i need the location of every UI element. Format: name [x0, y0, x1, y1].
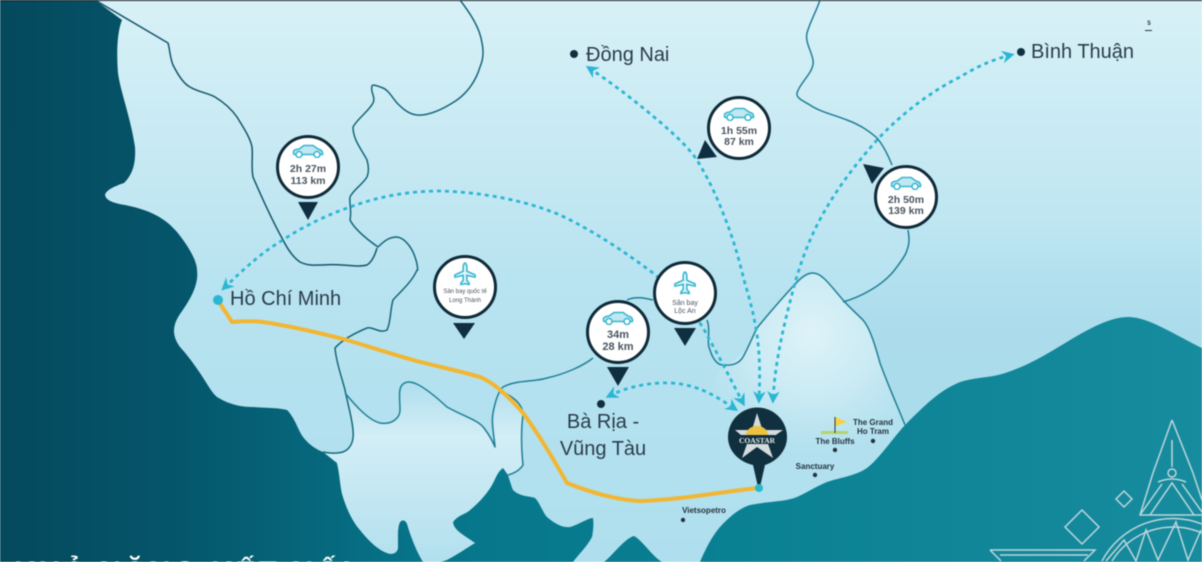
label: Sanctuary: Sanctuary [796, 462, 835, 471]
label: Vietsopetro [681, 506, 726, 522]
pin: Ba Ria travel time: 28 km [602, 341, 634, 353]
page number: 5 [1147, 21, 1151, 27]
route: Binh Thuan to Coastar [773, 55, 1011, 400]
road route to Coastar [219, 302, 758, 501]
pin: Long Thanh airport: Sân bay quốc tế [443, 289, 487, 295]
label: Dong Nai: Đồng Nai [586, 44, 669, 66]
pin: Coastar logo [728, 408, 787, 492]
pin: Binh Thuan travel time [863, 164, 936, 228]
label: The Bluffs: The Bluffs [815, 437, 855, 446]
route: Ho Chi Minh to Coastar [224, 191, 743, 403]
pin: Binh Thuan travel time: 139 km [888, 205, 924, 217]
pin: HCM travel time [278, 136, 338, 220]
decorative compass ornament [989, 419, 1202, 562]
dashed connection routes [224, 55, 1011, 409]
route: Ba Ria to Coastar [609, 383, 735, 409]
lighter lowland region [323, 382, 523, 562]
pin: HCM travel time: 113 km [290, 175, 326, 187]
province boundaries [95, 0, 909, 475]
label: The Grand Ho Tram [853, 418, 893, 443]
marker: Binh Thuan [1017, 48, 1025, 56]
pin: Dong Nai travel time: 1h 55m [721, 125, 757, 137]
route: Dong Nai to Coastar [589, 68, 760, 400]
icon: golf flag [821, 417, 848, 434]
label: Ba Ria - Vung Tau: Bà Rịa - [567, 411, 639, 433]
top edge line [0, 0, 1202, 1]
pin: Loc An airport: Lộc An [674, 308, 696, 315]
marker: Ho Chi Minh [213, 295, 223, 305]
label: Binh Thuan: Bình Thuận [1031, 41, 1134, 63]
label: Vietsopetro: Vietsopetro [682, 506, 726, 515]
pin: Ba Ria travel time [588, 302, 648, 386]
label: The Grand Ho Tram: Ho Tram [857, 427, 889, 436]
marker: Dong Nai [570, 50, 578, 58]
label: The Grand Ho Tram: The Grand [853, 418, 893, 427]
pin: Binh Thuan travel time: 2h 50m [888, 194, 924, 206]
page number [1145, 21, 1152, 31]
marker: Ba Ria [597, 400, 605, 408]
label: Sanctuary [796, 462, 835, 477]
pin: Dong Nai travel time [697, 98, 770, 159]
pin: Long Thanh airport [434, 256, 496, 339]
right inland shade [843, 225, 1202, 425]
pin: Ba Ria travel time: 34m [607, 329, 629, 341]
pin: Coastar logo: COASTAR [739, 436, 776, 445]
label: Ba Ria - Vung Tau: Vũng Tàu [560, 438, 646, 460]
label: Ho Chi Minh: Hồ Chí Minh [230, 288, 341, 310]
pin: Loc An airport: Sân bay [672, 300, 698, 307]
pin: Loc An airport [654, 262, 716, 346]
pin: Dong Nai travel time: 87 km [724, 136, 754, 148]
pin: HCM travel time: 2h 27m [290, 163, 326, 175]
label: The Bluffs [815, 437, 855, 452]
mountain region [700, 273, 905, 497]
pin: Long Thanh airport: Long Thành [449, 298, 481, 304]
